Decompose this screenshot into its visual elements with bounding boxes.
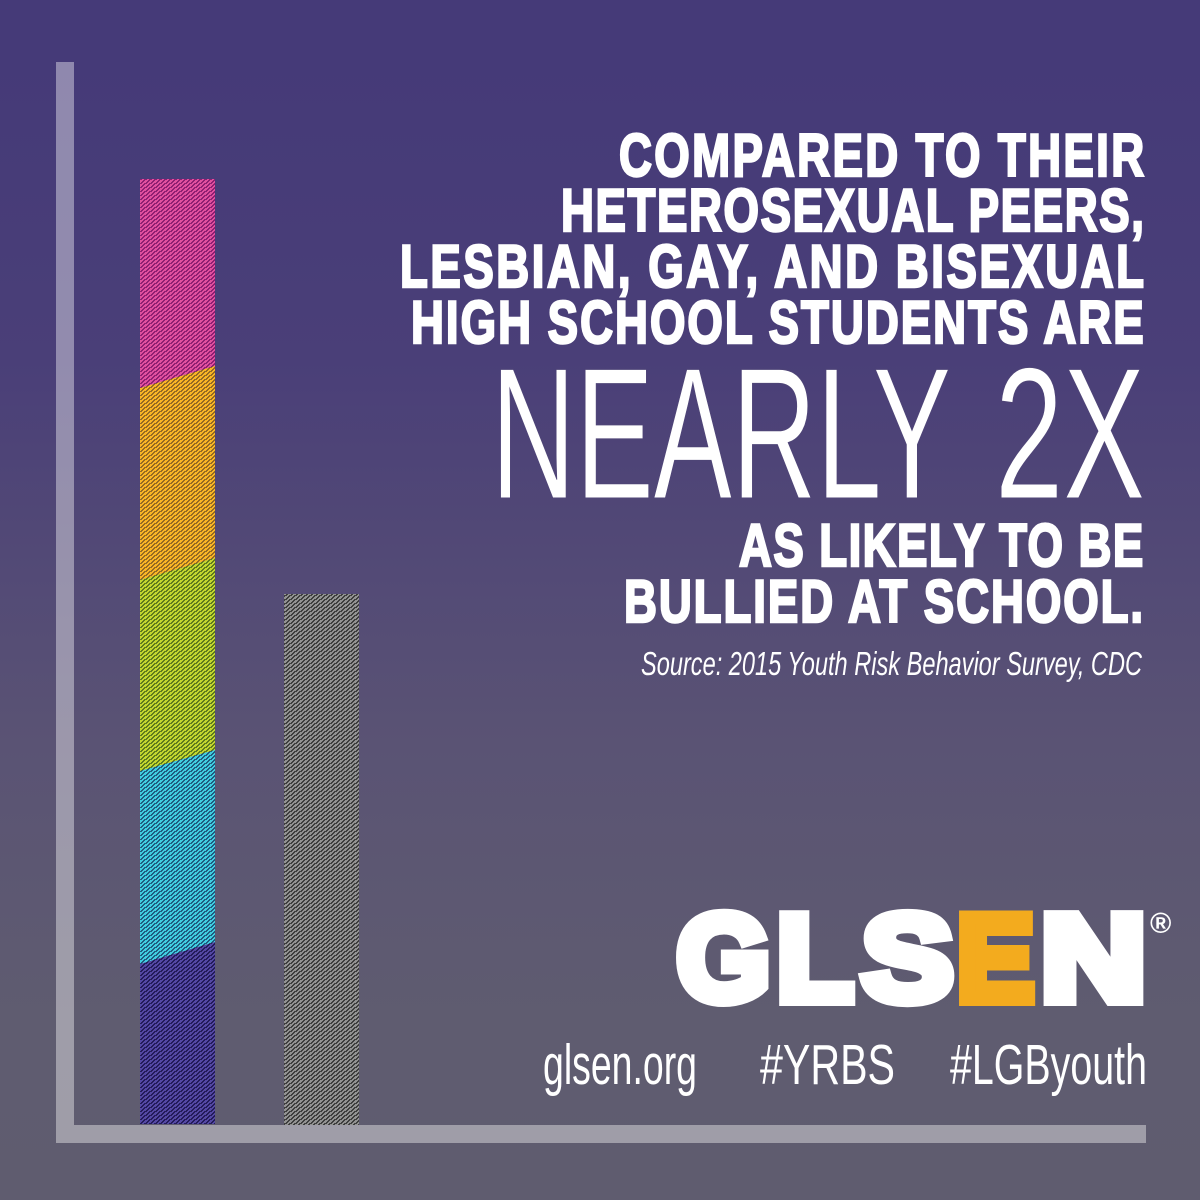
GLSEN logo: E (957, 890, 1034, 1026)
links and hashtags: #YRBS (760, 1033, 895, 1097)
headline text: COMPARED TO THEIR (619, 123, 1144, 190)
segment: pink (140, 179, 215, 388)
segment: blue (140, 750, 215, 964)
segment: purple (140, 942, 215, 1124)
bar: heterosexual students (gray) (284, 594, 359, 1125)
bar: LGB students (rainbow) (140, 179, 215, 1124)
GLSEN logo: L (777, 890, 853, 1026)
segment: orange (140, 366, 215, 580)
links and hashtags (543, 1033, 1147, 1097)
segment: green (140, 558, 215, 771)
headline text: LESBIAN, GAY, AND BISEXUAL (400, 234, 1144, 301)
links and hashtags: glsen.org (543, 1033, 697, 1097)
headline text: HIGH SCHOOL STUDENTS ARE (411, 290, 1144, 357)
GLSEN logo: G (677, 890, 770, 1026)
headline continuation: BULLIED AT SCHOOL. (624, 569, 1143, 636)
headline text (400, 123, 1144, 357)
headline continuation (624, 513, 1143, 636)
headline continuation: AS LIKELY TO BE (739, 513, 1143, 580)
GLSEN logo (677, 890, 1171, 1026)
GLSEN logo: S (862, 890, 953, 1026)
headline text: HETEROSEXUAL PEERS, (561, 178, 1144, 245)
GLSEN logo: N (1041, 890, 1146, 1026)
GLSEN logo: ® (1150, 908, 1171, 940)
